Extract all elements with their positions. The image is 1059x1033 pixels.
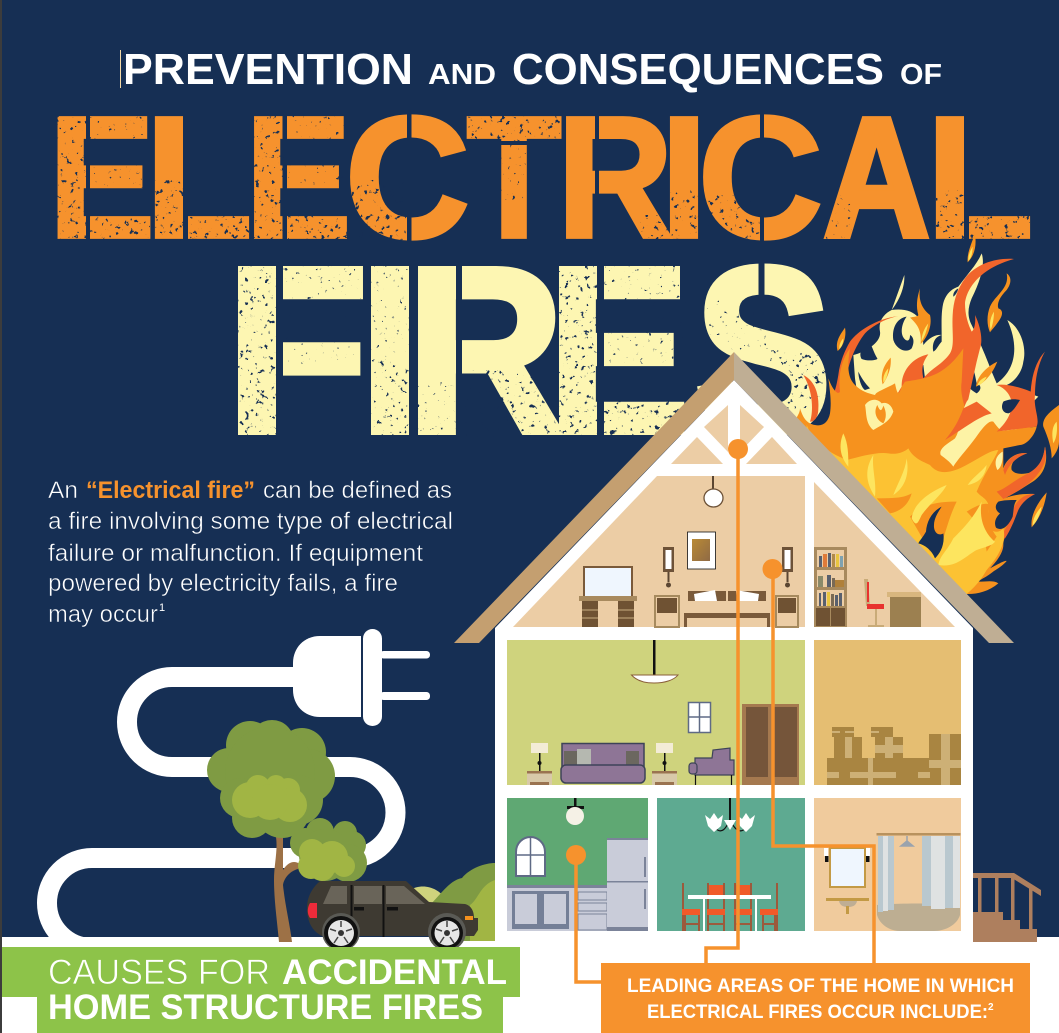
refrigerator [607,838,648,931]
sink [826,898,869,914]
counter and cabinets [507,885,607,931]
bathtub [877,904,960,931]
room: storage [814,640,961,785]
definition text: powered by electricity fails, a fire [48,570,398,597]
heading: FIRES: S [695,218,831,482]
house: white structure [454,352,1014,940]
framed picture [688,532,716,569]
window [688,702,711,733]
orange edge of the right side [997,427,1037,448]
definition text: can be defined as [263,477,452,504]
yellow lower body [807,425,1004,594]
heading: ELECTRICAL: A [824,82,930,272]
definition text: “Electrical fire” [86,477,255,504]
heading: FIRES: F [226,218,368,482]
wall lights [824,848,870,862]
red band at far right [997,352,1045,432]
definition text: a fire involving some type of electrical [48,508,453,535]
title line: prevention and consequences of: PREVENTION [123,45,413,94]
dining chairs [682,883,778,931]
title line: prevention and consequences of [120,45,942,94]
stairs [973,873,1041,942]
icon: tree [207,720,367,942]
holes between pale tongues [858,288,980,393]
shower head [901,836,913,846]
heading: FIRES: I [360,219,420,482]
big red tongue [897,259,1014,422]
main orange body [780,348,1046,594]
heading: ELECTRICAL: I [660,80,708,274]
sofa [561,744,645,783]
dining table [688,895,771,931]
wheels [322,913,466,951]
desk [887,592,921,627]
heading: ELECTRICAL: L [145,81,253,275]
bed [684,590,770,627]
heading: ELECTRICAL: E [48,81,155,275]
heading: ELECTRICAL [48,80,1034,275]
stacked boxes [827,727,961,785]
banner: causes for accidental home structure fires: HOME STRUCTURE FIRES [48,988,483,1027]
title line: prevention and consequences of: AND [428,59,496,91]
heading: ELECTRICAL: R [557,80,673,274]
red streak over pale tongue [945,402,992,440]
title line: prevention and consequences of: CONSEQUENCES [512,45,884,94]
ceiling lamp [632,640,678,683]
heading: ELECTRICAL: T [466,80,562,274]
kitchen light [566,798,584,825]
definition text: may occur [48,601,158,628]
bright yellow streaks [841,433,995,566]
definition text [48,477,453,628]
callout: leading areas: LEADING AREAS OF THE HOME IN WHICH [627,976,1014,997]
wardrobe [742,704,799,785]
heading: FIRES: E [548,219,689,482]
yellow centres of small flames [839,247,1057,526]
definition text: An [48,477,78,504]
banner: causes for accidental home structure fires: CAUSES FOR [48,953,270,992]
orange licks inside the yellow [877,493,997,552]
pale drop [996,452,1003,470]
attic truss panels [671,405,797,464]
callout: leading areas: 2 [988,1002,994,1013]
heading: ELECTRICAL: L [926,81,1034,275]
pendant lamp [712,476,714,490]
title line: prevention and consequences of: OF [900,59,942,91]
callout: leading areas [601,963,1030,1033]
heading: ELECTRICAL: E [245,81,352,275]
room: bathroom [814,798,961,931]
nightstands [655,596,798,627]
arched window [516,837,545,876]
room: attic bedroom [513,476,955,627]
heading: FIRES: R [407,220,564,482]
banner: causes for accidental home structure fires [2,947,520,1033]
left red curl [832,316,898,402]
banner: causes for accidental home structure fires: ACCIDENTAL [282,953,507,992]
orange inner curl [875,405,886,423]
shower curtain [876,833,960,912]
icon: plug and cord [47,629,430,948]
flame tongues in pale yellow [853,253,1038,502]
callout lines and marker dots [566,439,874,982]
chandelier [705,798,755,832]
dresser and mirror [579,567,637,627]
armchair [689,748,734,785]
desk chair [864,579,884,627]
small red left tongue [803,375,818,422]
heading: ELECTRICAL: C [698,80,823,274]
icon: car [307,881,478,951]
icon: bushes behind the car [410,863,495,941]
heading: FIRES [226,218,831,482]
wall sconces [663,547,793,588]
roof left [454,352,734,643]
roof right [734,352,1014,643]
red hooks on the right edge [997,447,1046,538]
bookshelf [814,547,847,627]
lamps and side tables [527,743,677,785]
icon: flames behind the roof [780,233,1059,594]
pale tongue on the left of the body [865,400,893,430]
mirror [830,848,865,887]
callout: leading areas: ELECTRICAL FIRES OCCUR INCLUDE: [647,1002,988,1023]
holes in the body [918,399,1020,558]
ground [2,931,1059,1033]
room: kitchen [507,798,648,931]
heading: ELECTRICAL: C [345,80,470,274]
definition text: failure or malfunction. If equipment [48,540,423,567]
large pale tongue on the right [940,392,1032,467]
room: living room [507,640,805,785]
definition text: 1 [159,602,165,614]
small detached flames [837,233,1059,527]
room: dining room [657,798,805,931]
